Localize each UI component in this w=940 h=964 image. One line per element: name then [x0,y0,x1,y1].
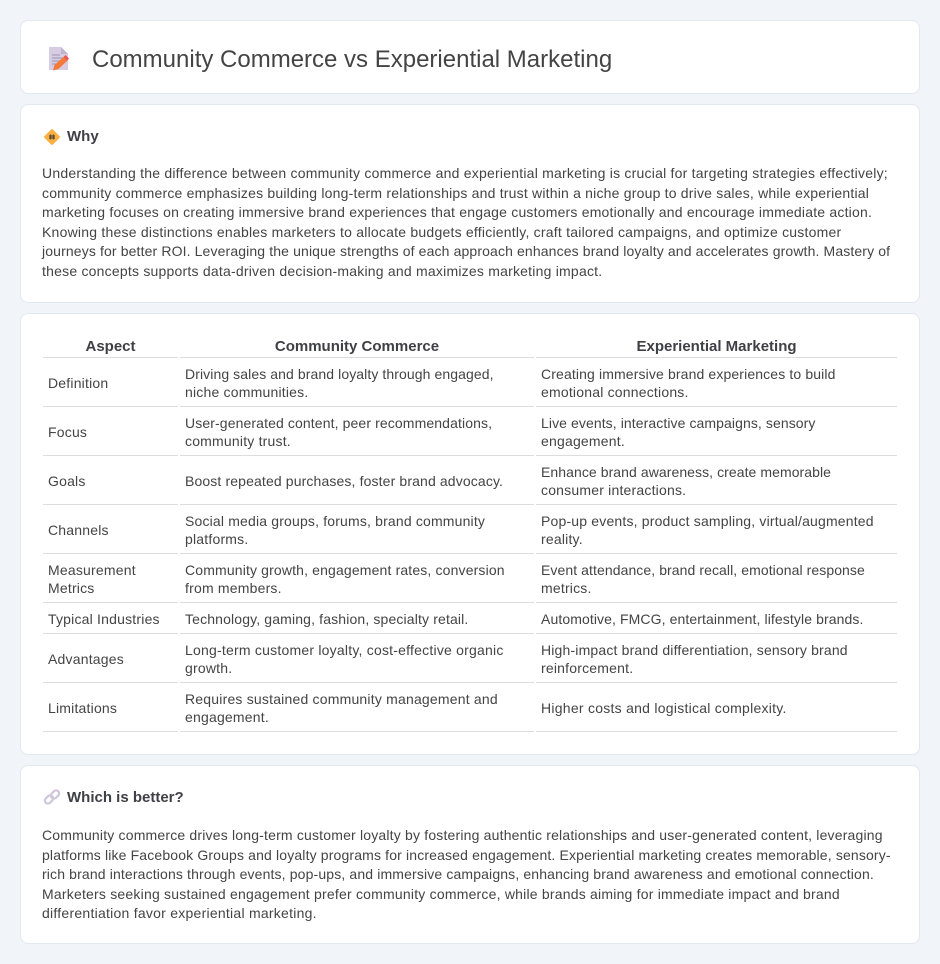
comparison table: Automotive, FMCG, entertainment, lifestyle brands. [541,611,863,627]
comparison table: Measurement [48,562,136,578]
comparison table: Definition [48,375,108,391]
text block: verdict: Community commerce drives long-term customer loyalty by fostering authentic relationships and user-generated content, leveraging [42,827,883,843]
comparison table: consumer interactions. [541,482,686,498]
text block: verdict: differentiation favor experiential marketing. [42,905,317,921]
comparison table: Aspect [85,338,136,354]
panel: why [20,104,920,303]
comparison table: Focus [48,424,87,440]
comparison table: from members. [185,580,282,596]
icon: diamond sign [44,129,60,145]
panel: comparison table [20,313,920,755]
comparison table: High-impact brand differentiation, sensory brand [541,642,848,658]
comparison table: Higher costs and logistical complexity. [541,700,787,716]
text block: verdict: Marketers seeking sustained engagement prefer community commerce, while brands aiming for immediate impact and brand [42,886,840,902]
comparison table: community trust. [185,433,291,449]
comparison table: emotional connections. [541,384,689,400]
comparison table: Community Commerce [275,338,439,354]
text block: why explanation: Knowing these distinctions enables marketers to allocate budgets efficiently, craft tailored campaigns, and optimize customer [42,224,841,240]
text block: why explanation [42,165,890,279]
comparison table: Metrics [48,580,95,596]
comparison table: Boost repeated purchases, foster brand advocacy. [185,473,503,489]
icon: link [44,789,60,805]
text block: why explanation: community commerce emphasizes building long-term relationships and trust within a niche group to drive sales, while experiential [42,185,869,201]
comparison table: Limitations [48,700,117,716]
text block: why explanation: journeys for better ROI. Leveraging the unique strengths of each approach enhances brand loyalty and accelerates growth. Mastery of [42,243,890,259]
comparison table: Live events, interactive campaigns, sensory [541,415,816,431]
panel: which is better [20,765,920,944]
text block: verdict: platforms like Facebook Groups and loyalty programs for increased engagement. Experiential marketing creates memorable, sensory- [42,847,891,863]
comparison table: growth. [185,660,232,676]
comparison table: Experiential Marketing [636,338,797,354]
comparison table: Typical Industries [48,611,160,627]
icon: memo with pencil [49,47,69,70]
comparison table: User-generated content, peer recommendations, [185,415,492,431]
comparison table: Requires sustained community management and [185,691,498,707]
comparison table: Technology, gaming, fashion, specialty retail. [185,611,468,627]
comparison table [43,338,897,732]
comparison table: reinforcement. [541,660,633,676]
comparison table: engagement. [541,433,625,449]
comparison table: platforms. [185,531,248,547]
comparison table: niche communities. [185,384,308,400]
comparison table: reality. [541,531,583,547]
comparison table: engagement. [185,709,269,725]
comparison table: Long-term customer loyalty, cost-effective organic [185,642,504,658]
text block: why explanation: marketing focuses on creating immersive brand experiences that engage customers emotionally and encourage immediate action. [42,204,872,220]
comparison table: Community growth, engagement rates, conversion [185,562,505,578]
comparison table: metrics. [541,580,592,596]
comparison table: Pop-up events, product sampling, virtual/augmented [541,513,874,529]
comparison table: Goals [48,473,86,489]
text block: why explanation: these concepts supports data-driven decision-making and maximizes marketing impact. [42,263,602,279]
comparison table: Driving sales and brand loyalty through engaged, [185,366,494,382]
comparison table: Channels [48,522,109,538]
comparison table: Creating immersive brand experiences to build [541,366,836,382]
text block: verdict: rich brand interactions through events, pop-ups, and immersive campaigns, enhancing brand awareness and emotional connection. [42,866,874,882]
comparison table: Social media groups, forums, brand community [185,513,485,529]
text block: why explanation: Understanding the difference between community commerce and experiential marketing is crucial for targeting strategies effectively; [42,165,888,181]
heading: which is better: Which is better? [67,789,184,806]
panel: title header [20,20,920,94]
comparison table: Advantages [48,651,124,667]
text block: verdict [42,827,891,921]
comparison table: Event attendance, brand recall, emotional response [541,562,865,578]
title: Community Commerce vs Experiential Marketing [92,46,612,73]
comparison table: Enhance brand awareness, create memorable [541,464,831,480]
heading: why: Why [67,128,99,145]
